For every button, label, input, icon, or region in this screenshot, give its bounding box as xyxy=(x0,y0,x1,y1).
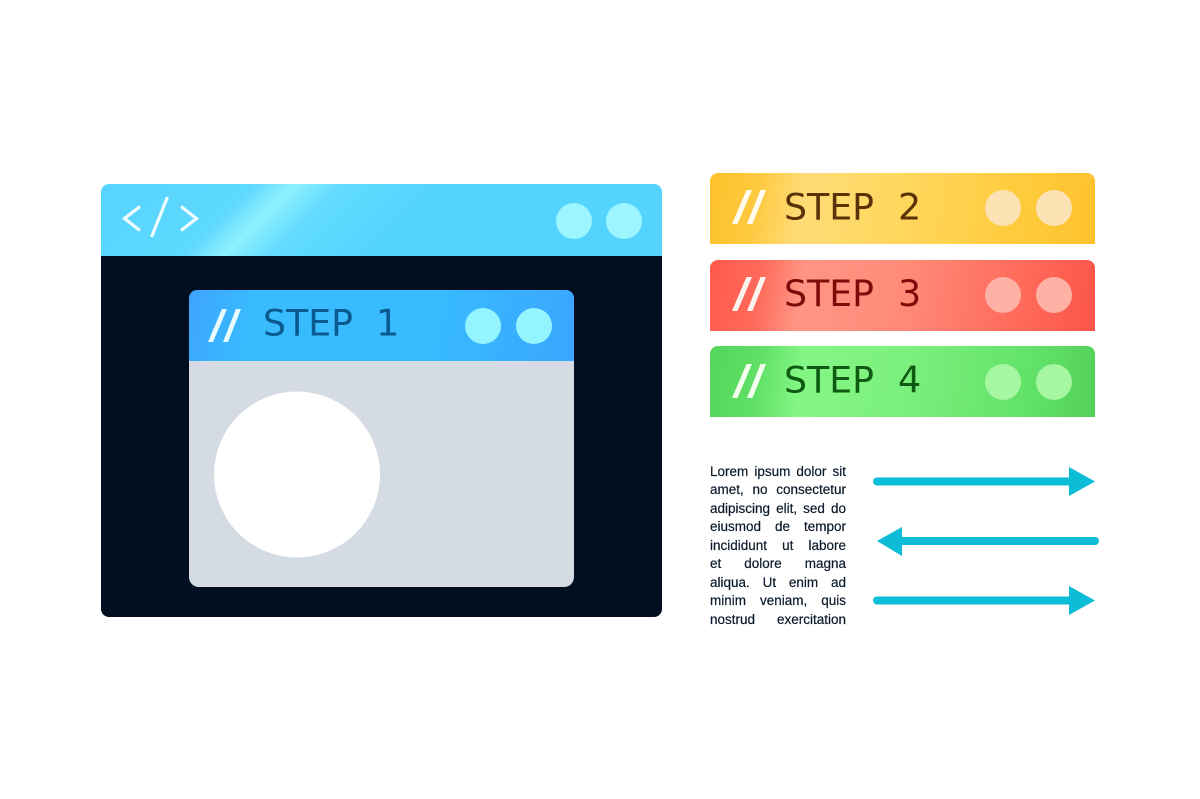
step 2 dots xyxy=(985,190,1072,226)
icon: slashes xyxy=(732,277,766,311)
step 1 dots xyxy=(465,308,552,344)
step 1 label: 1 xyxy=(376,302,399,344)
step 1 label: STEP xyxy=(263,302,353,344)
text block: lorem ipsum: nostrud exercitation xyxy=(710,612,846,627)
arrow: bottom right xyxy=(873,586,1095,615)
step 2 label: STEP xyxy=(784,186,874,228)
text block: lorem ipsum: eiusmod de tempor xyxy=(710,519,846,534)
text block: lorem ipsum: adipiscing elit, sed do xyxy=(710,501,846,516)
text block: lorem ipsum: amet, no consectetur xyxy=(710,482,846,497)
white circle xyxy=(214,392,380,558)
icon: slashes xyxy=(208,309,241,342)
arrow: middle left xyxy=(877,527,1099,556)
window control dots xyxy=(556,203,642,239)
text block: lorem ipsum: minim veniam, quis xyxy=(710,593,846,608)
arrow: top right xyxy=(873,467,1095,496)
icon: slashes xyxy=(732,190,766,224)
icon: slashes xyxy=(732,364,766,398)
step 4 label: 4 xyxy=(898,358,921,402)
text block: lorem ipsum: et dolore magna xyxy=(710,556,846,571)
text block: lorem ipsum xyxy=(710,464,846,627)
step 1 title bar xyxy=(189,290,574,361)
window title bar xyxy=(101,184,662,256)
step 3 label: 3 xyxy=(898,272,921,315)
step 3 label: STEP xyxy=(784,272,874,315)
step 2 label: 2 xyxy=(898,186,921,228)
text block: lorem ipsum: incididunt ut labore xyxy=(710,538,846,553)
inner window body xyxy=(189,350,574,587)
text block: lorem ipsum: Lorem ipsum dolor sit xyxy=(710,464,846,478)
panel: step 4 bar xyxy=(710,346,1095,417)
panel: step 1 window xyxy=(189,290,574,587)
icon: code brackets xyxy=(124,197,196,237)
panel: step 2 bar xyxy=(710,173,1095,244)
step 4 dots xyxy=(985,364,1072,400)
text block: lorem ipsum: aliqua. Ut enim ad xyxy=(710,575,846,590)
panel: step 3 bar xyxy=(710,260,1095,331)
panel: main browser window xyxy=(101,184,662,617)
window body xyxy=(101,250,662,617)
step 4 label: STEP xyxy=(784,358,874,402)
step 3 dots xyxy=(985,277,1072,313)
